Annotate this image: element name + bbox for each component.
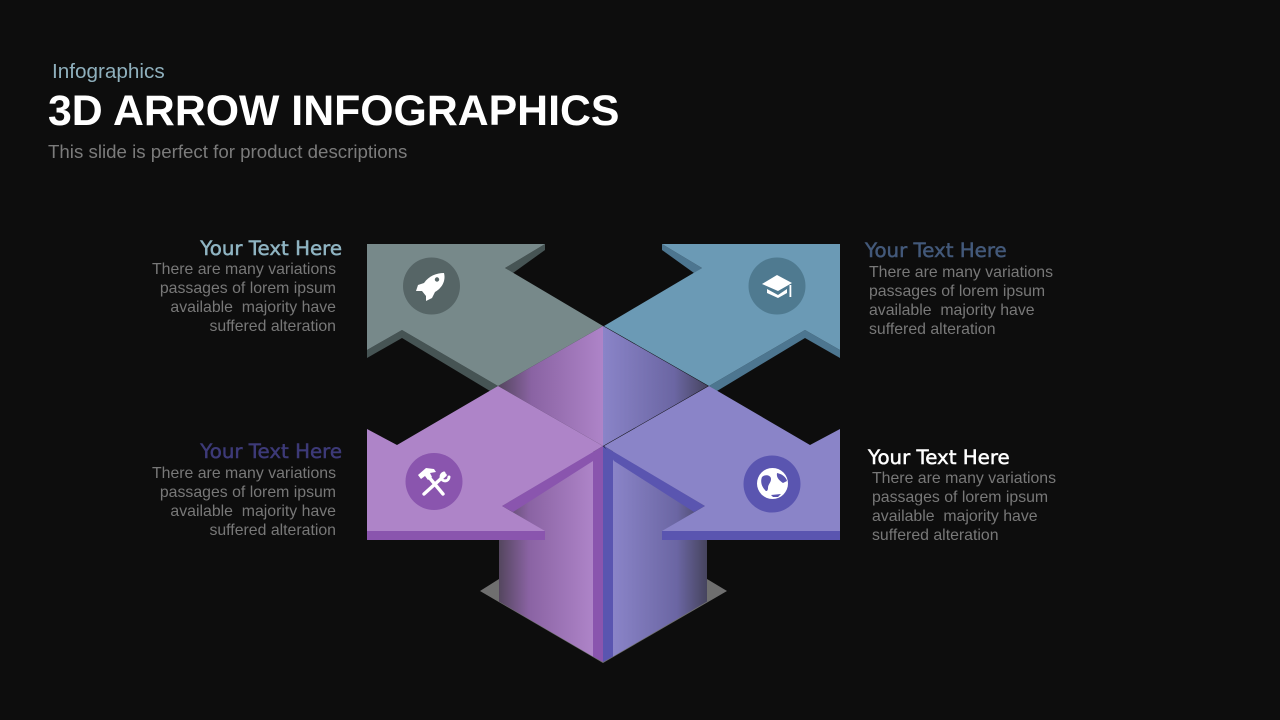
icon badge: graduation cap [748, 258, 806, 314]
text block: bottom left [152, 440, 342, 539]
eyebrow label: Infographics [52, 60, 165, 83]
icon badge: rocket [403, 258, 460, 314]
subtitle: This slide is perfect for product descriptions [48, 141, 407, 162]
text block: top left [152, 237, 342, 335]
heading: Your Text Here [868, 446, 1010, 469]
upper shaft [498, 326, 708, 446]
body text: There are many variations passages of lorem ipsum available majority have suffered alteration [152, 465, 336, 539]
arrow: top right blue [604, 244, 840, 391]
lower shaft [499, 446, 707, 662]
heading: Your Text Here [865, 239, 1007, 262]
icon badge: tools [406, 453, 462, 510]
arrow: bottom right violet [604, 386, 840, 540]
body text: There are many variations passages of lorem ipsum available majority have suffered alteration [869, 264, 1053, 338]
arrow: bottom left purple [367, 386, 603, 540]
body text: There are many variations passages of lorem ipsum available majority have suffered alteration [872, 470, 1056, 544]
heading: Your Text Here [200, 237, 342, 260]
body text: There are many variations passages of lorem ipsum available majority have suffered alteration [152, 261, 336, 335]
text block: bottom right [868, 446, 1056, 544]
floor shadow [480, 579, 727, 663]
arrow: top left grey [367, 244, 603, 391]
text block: top right [864, 239, 1053, 338]
title: 3D ARROW INFOGRAPHICS [48, 87, 619, 135]
heading: Your Text Here [200, 440, 342, 463]
icon badge: globe [744, 456, 800, 512]
